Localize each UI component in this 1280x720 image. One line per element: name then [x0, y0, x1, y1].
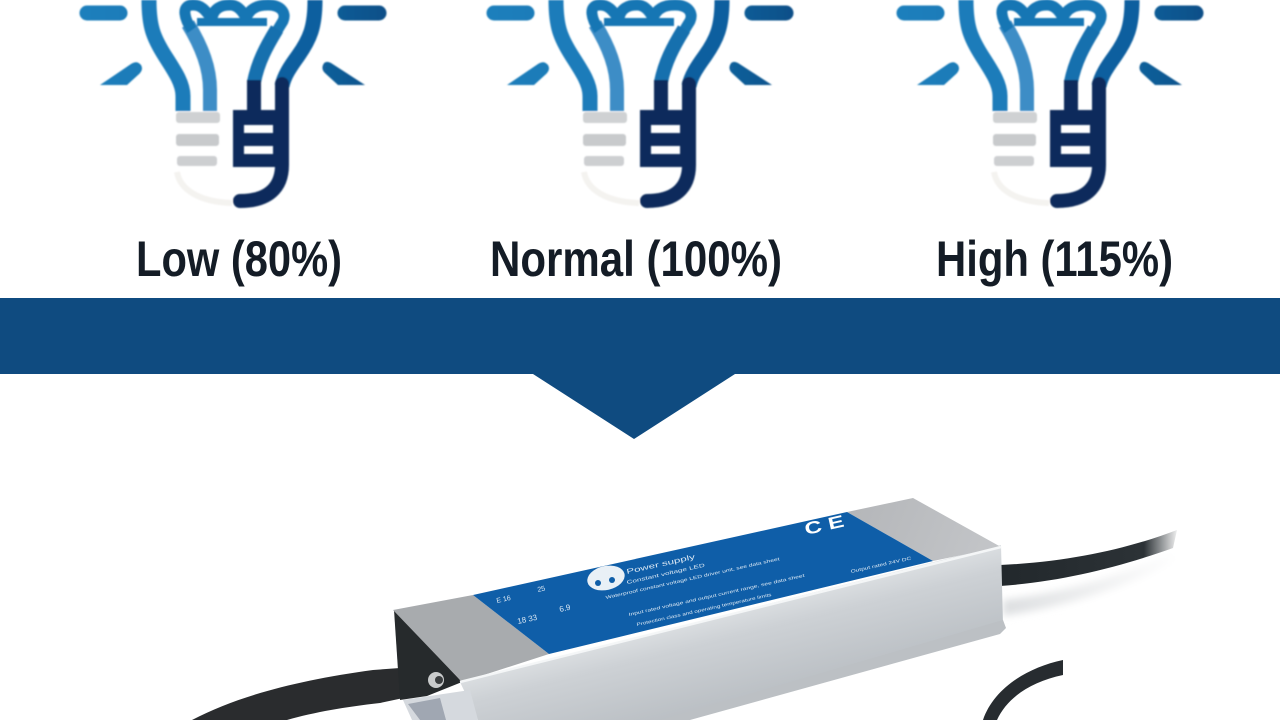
- label fine print: [496, 554, 913, 627]
- label fine print: E 16: [496, 595, 512, 605]
- label fine print: Constant voltage LED: [626, 563, 706, 586]
- label: low: Low (80%): [136, 231, 342, 287]
- icon: low brightness bulb: [87, 0, 379, 203]
- top face right: [847, 498, 1001, 561]
- label logo: [585, 562, 627, 594]
- label fine print: 6.9: [558, 603, 572, 614]
- screw: [428, 672, 444, 688]
- front face: [460, 545, 1003, 720]
- mounting flange: [660, 620, 1006, 720]
- label fine print: Protection class and operating temperature limits: [636, 592, 773, 627]
- label fine print: Power supply: [626, 554, 697, 576]
- left cable: [192, 668, 427, 720]
- label fine print: 25: [537, 585, 546, 594]
- label fine print: Output rated 24V DC: [850, 555, 913, 574]
- top face left: [393, 595, 549, 682]
- icon: high brightness bulb: [904, 0, 1196, 203]
- right cable: [1000, 530, 1177, 586]
- label: high: High (115%): [936, 231, 1173, 287]
- highlight edge: [460, 547, 1001, 682]
- label fine print: Input rated voltage and output current range, see data sheet: [628, 573, 806, 617]
- label fine print: Waterproof constant voltage LED driver unit, see data sheet: [605, 556, 781, 600]
- dark end face: [394, 610, 462, 700]
- bracket: [403, 690, 478, 720]
- blue label: [473, 512, 933, 654]
- right cable shadow: [1003, 552, 1180, 616]
- label: normal: Normal (100%): [490, 231, 782, 287]
- product: LED driver: [192, 498, 1180, 720]
- icon: normal brightness bulb: [494, 0, 786, 203]
- lower right cable: [983, 660, 1063, 720]
- banner arrow: [0, 298, 1280, 439]
- CE mark: C E: [803, 512, 846, 539]
- label fine print: 18 33: [516, 613, 539, 626]
